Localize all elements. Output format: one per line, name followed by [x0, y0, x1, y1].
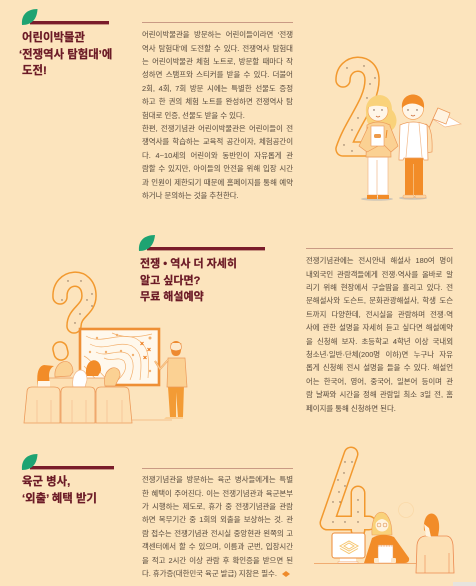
woman at desk: [364, 512, 409, 563]
text block: section 3: 가 시행하는 제도로, 휴가 중 전쟁기념관을 관람: [142, 502, 293, 511]
text block: section 3: 람 접수는 전쟁기념관 전시실 중앙현관 왼쪽의 고: [142, 529, 293, 538]
heading: section 3: [22, 475, 97, 504]
text block: section 3: 한 혜택이 주어진다. 이는 전쟁기념관과 육군본부: [142, 489, 293, 498]
heading: section 3: ‘외출’ 혜택 받기: [22, 492, 97, 504]
desk line: [314, 562, 416, 564]
text block: section 2: 페이지를 통해 신청하면 된다.: [306, 404, 396, 413]
text block: section 2: 롭게 신청해 전시 설명을 들을 수 있다. 해설언: [306, 363, 453, 372]
visitor seen from behind: [416, 514, 454, 573]
text block: section 1: 다. 4~10세의 어린이와 동반인이 자유롭게 관: [142, 151, 293, 160]
text block: section 2: 사에 관한 설명을 자세히 듣고 싶다면 해설예약: [306, 323, 453, 332]
text block: section 2: 을 신청해 보자. 초등학교 4학년 이상 국내외: [306, 337, 453, 346]
text block: section 1: 성하면 스탬프와 스티커를 받을 수 있다. 더불어: [142, 70, 293, 79]
text block: section 1: 험대로 인증, 선물도 받을 수 있다.: [142, 111, 245, 120]
text block: section 2: 내외국인 관람객들에게 전쟁·역사를 올바로 알: [306, 270, 453, 279]
illustration: question mark, map lecture and audience: [24, 279, 187, 423]
text block: section 1: 2회, 4회, 7회 방문 시에는 특별한 선물도 증정: [142, 84, 293, 93]
text block: section 2: 트까지 다양한데, 전시실을 관람하며 전쟁·역: [306, 310, 453, 319]
text block: section 1: [142, 30, 293, 200]
text block: section 3: [142, 475, 293, 578]
text block: section 1: 쟁역사를 학습하는 교육적 공간이자, 체험공간이: [142, 137, 293, 146]
heading mark: section 1 leaf and bar: [22, 9, 109, 25]
heading: section 1: ‘전쟁역사 탐험대’에: [19, 48, 112, 60]
faint watermark circle: [398, 502, 414, 518]
end mark: [282, 571, 290, 577]
heading: section 1: 도전!: [22, 65, 47, 77]
text block: section 3: 을 적고 2시간 이상 관람 후 확인증을 받으면 된: [142, 556, 293, 565]
audience: [24, 360, 172, 423]
text block: section 2: 문해설사와 도슨트, 문화관광해설사, 학생 도슨: [306, 296, 453, 305]
text block: section 1: 하거나 문의하는 것을 추천한다.: [142, 191, 239, 200]
text block: section 2: 전쟁기념관에는 전시안내 해설사 180여 명이: [306, 256, 453, 265]
numeral 2: [343, 64, 376, 152]
illustration: number 4 with visitor at information desk: [314, 454, 454, 573]
heading: section 1: 어린이박물관: [22, 32, 85, 44]
grey corner patch: [453, 582, 476, 586]
heading: section 2: 알고 싶다면?: [140, 274, 200, 286]
text block: section 1: 는 어린이박물관 체험 노트로, 방문할 때마다 작: [142, 57, 293, 66]
map board: [80, 329, 159, 385]
girl: [359, 95, 398, 201]
text block: section 3: 다. 휴가증(대한민국 육군 발급) 지참은 필수.: [142, 569, 277, 578]
illustration: number 2 with two children: [343, 64, 461, 201]
heading mark: section 3 leaf and bar: [22, 454, 114, 470]
text block: section 2: 리기 위해 현장에서 구슬땀을 흘리고 있다. 전: [306, 283, 453, 292]
text block: section 2: 람 날짜와 시간을 정해 관람일 최소 3일 전, 홈: [306, 390, 453, 399]
text block: section 2: 어는 한국어, 영어, 중국어, 일본어 등이며 관: [306, 377, 453, 386]
text block: section 1: 어린이박물관을 방문하는 어린이들이라면 ‘전쟁: [142, 30, 293, 39]
rule: section 3: [142, 468, 293, 469]
computer monitor: [332, 533, 365, 563]
text block: section 1: 람할 수 있지만, 아이들의 안전을 위해 입장 시간: [142, 164, 293, 173]
text block: section 1: 과 인원이 제한되기 때문에 홈페이지를 통해 예약: [142, 178, 293, 187]
text block: section 3: 하면 복무기간 중 1회의 외출을 보상하는 것. 관: [142, 515, 293, 524]
presenter: [155, 341, 187, 419]
rule: section 1: [142, 22, 293, 23]
numeral 4: [327, 454, 369, 530]
text block: section 2: 청소년·일반·단체(200명 이하)면 누구나 자유: [306, 350, 453, 359]
text block: section 1: 하고 한 권의 체험 노트를 완성하면 전쟁역사 탐: [142, 97, 293, 106]
question mark numeral: [60, 279, 93, 353]
heading: section 1: [19, 31, 112, 77]
boy with flag: [399, 94, 461, 200]
heading: section 2: 전쟁 • 역사 더 자세히: [140, 258, 237, 270]
text block: section 1: 한편, 전쟁기념관 어린이박물관은 어린이들이 전: [142, 124, 293, 133]
text block: section 3: 전쟁기념관을 방문하는 육군 병사들에게는 특별: [142, 475, 293, 484]
rule: section 2: [306, 248, 453, 249]
heading mark: section 2 leaf and bar: [139, 235, 265, 251]
heading: section 2: 무료 해설예약: [140, 291, 204, 303]
text block: section 2: [306, 256, 453, 413]
heading: section 3: 육군 병사,: [22, 476, 70, 488]
text block: section 3: 객센터에서 할 수 있으며, 이름과 군번, 입장시간: [142, 542, 293, 551]
heading: section 2: [140, 258, 237, 303]
text block: section 1: 역사 탐험대’에 도전할 수 있다. 전쟁역사 탐험대: [142, 44, 293, 53]
